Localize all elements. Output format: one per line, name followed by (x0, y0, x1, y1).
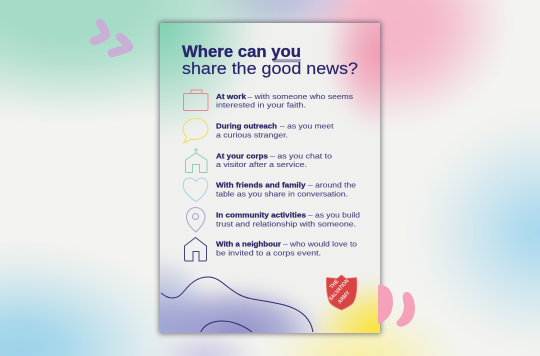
item: at your corps: a visitor after a service. (216, 160, 307, 169)
item: community activities: trust and relationship with someone. (216, 219, 356, 228)
decoration: pink marks bottom right (378, 285, 415, 327)
item: at work (216, 92, 353, 110)
item: neighbour (216, 240, 357, 258)
item: friends and family (216, 180, 356, 198)
item: community activities (216, 210, 360, 228)
title: share the good news? (182, 60, 358, 78)
item: during outreach: – as you meet (280, 122, 334, 131)
logo: red shield: THE (329, 279, 340, 290)
item: friends and family: – around the (308, 180, 356, 189)
item: at your corps: – as you chat to (270, 151, 332, 160)
item: neighbour: – who would love to (283, 240, 357, 249)
item: at your corps: At your corps (216, 151, 268, 160)
item: at work: – with someone who seems (248, 92, 353, 101)
item: at work: interested in your faith. (216, 101, 306, 110)
icon: corps building (186, 148, 207, 172)
logo: red shield: SALVATION (328, 278, 351, 302)
item: at your corps (216, 151, 332, 169)
poster card (160, 23, 380, 332)
bottom contour lines (161, 277, 313, 332)
item: neighbour: With a neighbour (216, 240, 281, 249)
icon: briefcase (184, 90, 208, 110)
item: community activities: In community activities (216, 210, 306, 219)
logo: red shield (326, 275, 357, 310)
icon: heart (183, 178, 208, 202)
decoration: purple marks top left (94, 23, 129, 53)
title: Where can you (182, 43, 301, 61)
item: neighbour: be invited to a corps event. (216, 249, 321, 258)
logo: red shield: ARMY (337, 290, 352, 305)
item: friends and family: table as you share in conversation. (216, 189, 348, 198)
item: during outreach: During outreach (216, 122, 277, 131)
title (182, 43, 358, 78)
item: friends and family: With friends and family (216, 180, 306, 189)
item: during outreach (216, 122, 334, 139)
icon: location pin (186, 208, 205, 232)
icon: house (184, 238, 206, 261)
item: community activities: – as you build (308, 210, 360, 219)
item: during outreach: a curious stranger. (216, 130, 288, 139)
icon: speech bubble (183, 118, 208, 143)
item: at work: At work (216, 92, 247, 101)
